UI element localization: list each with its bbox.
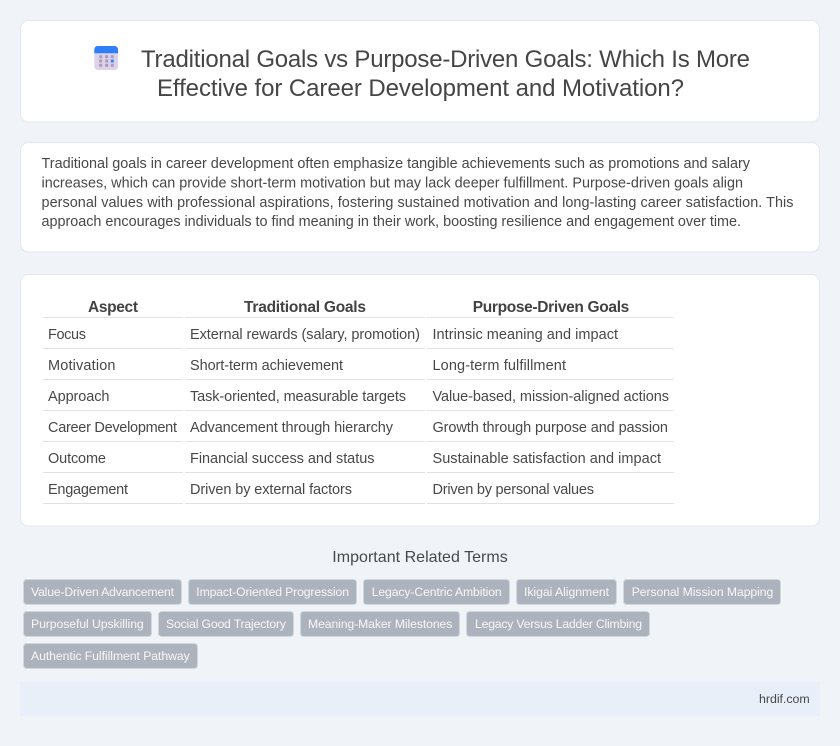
table row: focus: Intrinsic meaning and impact — [432, 327, 618, 343]
title — [141, 46, 750, 102]
table row: approach: Task-oriented, measurable targets — [190, 389, 406, 405]
text block: introduction paragraph: personal values with professional aspirations, fostering sustained motivation and long-lasting career satisfaction. This — [42, 195, 794, 211]
tag — [516, 580, 616, 604]
table row: focus — [48, 327, 618, 343]
tag: Social Good Trajectory — [166, 617, 287, 631]
heading: important related terms: Important Related Terms — [332, 549, 508, 566]
footer bar — [20, 682, 820, 716]
tag: Authentic Fulfillment Pathway — [31, 649, 191, 663]
table row: motivation: Long-term fulfillment — [432, 358, 566, 374]
tag — [158, 612, 294, 636]
tag: Purposeful Upskilling — [31, 617, 144, 631]
tag — [24, 644, 198, 668]
table row: engagement: Driven by personal values — [432, 482, 594, 498]
table row: career development — [48, 420, 668, 436]
table row: motivation: Motivation — [48, 358, 116, 374]
panel: related term tags — [24, 580, 780, 668]
table row: engagement: Driven by external factors — [190, 482, 352, 498]
tag — [624, 580, 780, 604]
tag — [300, 612, 460, 636]
tag: Legacy-Centric Ambition — [372, 585, 502, 599]
table row: approach: Approach — [48, 389, 110, 405]
table header row: Traditional Goals — [244, 299, 366, 316]
title: Effective for Career Development and Motivation? — [157, 75, 684, 102]
table row: outcome — [48, 451, 661, 467]
tag — [466, 612, 650, 636]
table header row — [88, 299, 629, 316]
table row: motivation: Short-term achievement — [190, 358, 343, 374]
text block: introduction paragraph: increases, which can provide short-term motivation but may lack deeper fulfillment. Purpose-driven goals align — [42, 176, 743, 192]
table row: motivation — [48, 358, 566, 374]
tag: Meaning-Maker Milestones — [308, 617, 452, 631]
table row: career development: Growth through purpose and passion — [432, 420, 668, 436]
text block: introduction paragraph: Traditional goals in career development often emphasize tangible achievements such as promotions and salary — [42, 156, 751, 172]
tag — [24, 612, 152, 636]
table row: engagement — [48, 482, 594, 498]
table row: outcome: Outcome — [48, 451, 106, 467]
tag — [188, 580, 356, 604]
tag: Legacy Versus Ladder Climbing — [475, 617, 642, 631]
table row: career development: Career Development — [48, 420, 177, 436]
table row: approach — [48, 389, 669, 405]
icon: calendar — [94, 46, 118, 70]
tag — [24, 580, 182, 604]
tag — [364, 580, 510, 604]
tag: Ikigai Alignment — [524, 585, 610, 599]
text block: introduction paragraph — [42, 156, 794, 230]
panel: comparison table — [20, 274, 820, 526]
tag: Personal Mission Mapping — [632, 585, 773, 599]
tag: Value-Driven Advancement — [31, 585, 175, 599]
panel: introduction — [20, 142, 820, 252]
table row: outcome: Sustainable satisfaction and impact — [432, 451, 661, 467]
table row: engagement: Engagement — [48, 482, 128, 498]
table row: outcome: Financial success and status — [190, 451, 374, 467]
title: Traditional Goals vs Purpose-Driven Goals: Which Is More — [141, 46, 750, 73]
footer source text: hrdif.com — [759, 692, 810, 706]
tag: Impact-Oriented Progression — [196, 585, 349, 599]
panel: header card — [20, 20, 820, 122]
table header row: Purpose-Driven Goals — [473, 299, 629, 316]
table row: focus: External rewards (salary, promotion) — [190, 327, 420, 343]
table row: career development: Advancement through hierarchy — [190, 420, 394, 436]
table row: approach: Value-based, mission-aligned actions — [432, 389, 669, 405]
text block: introduction paragraph: approach encourages individuals to find meaning in their work, boosting resilience and engagement over time. — [42, 214, 741, 230]
table row: focus: Focus — [48, 327, 86, 343]
table header row: Aspect — [88, 299, 138, 316]
